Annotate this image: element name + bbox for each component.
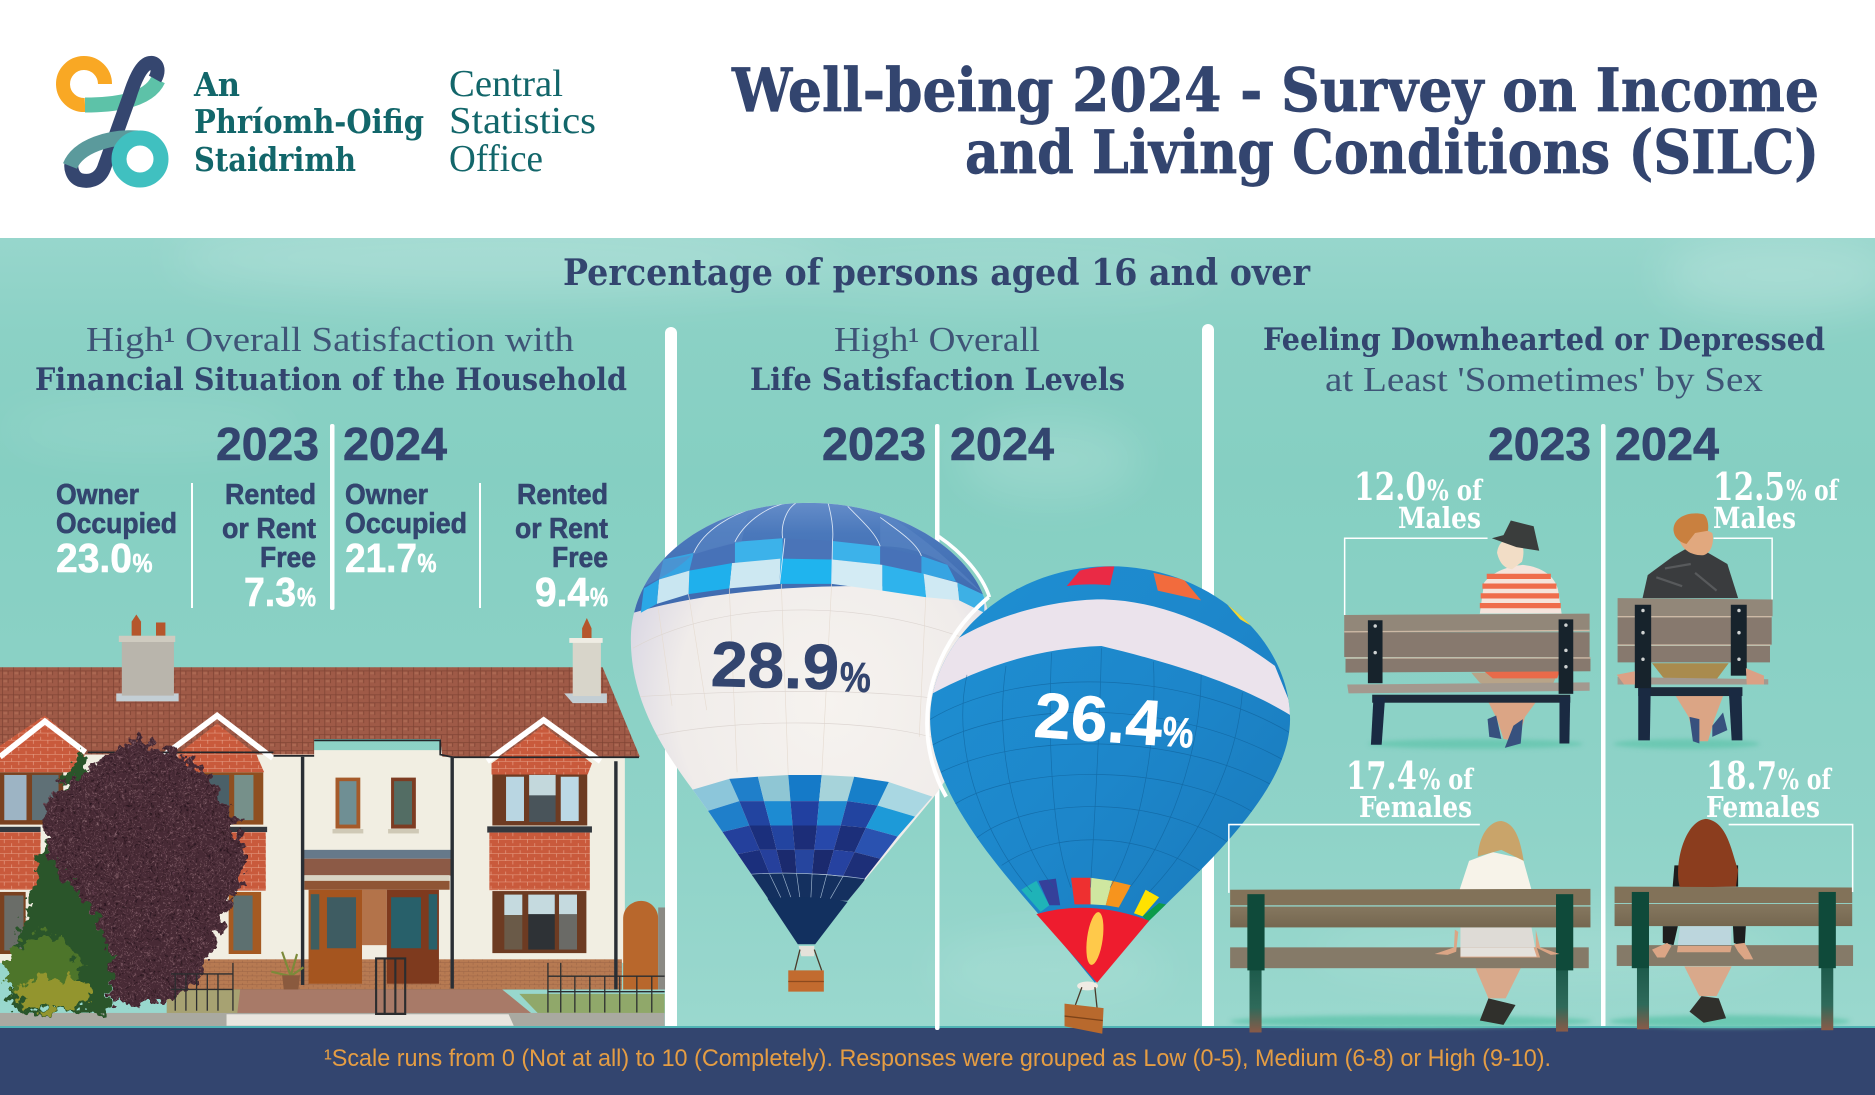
logo: Irish name: Phríomh-Oifig (194, 102, 424, 141)
stat: 2023 owner occupied: Occupied (56, 508, 177, 540)
year labels: right panel: 2023 (1488, 418, 1591, 470)
stat: 2023 rented or rent free: Rented (225, 479, 316, 511)
stat: males 2023 (1354, 464, 1484, 535)
year labels: right panel (1488, 418, 1719, 470)
sky background panel (0, 220, 1875, 1028)
balloon 2024: white halo (927, 597, 989, 797)
stat: females 2023: % of (1419, 763, 1475, 796)
stat: males 2023: 12.0 (1354, 464, 1426, 509)
balloon value: 2023: 28.9 (710, 628, 840, 703)
stat: 2023 owner occupied (56, 479, 177, 581)
panel heading: downhearted or depressed (1263, 322, 1825, 399)
stat: females 2024: Females (1706, 790, 1820, 824)
balloon 2023: neck (767, 897, 848, 944)
house: tile-hung bays (0, 826, 592, 891)
stat: females 2023: 17.4 (1346, 753, 1417, 798)
panel heading: life satisfaction (750, 320, 1125, 398)
year labels: middle panel: 2024 (950, 418, 1054, 470)
house: chimney flashing (116, 693, 607, 703)
stat: 2023 rented or rent free: or Rent (222, 513, 316, 545)
logo: English name: Central (449, 63, 563, 105)
female 2023: person (1460, 821, 1537, 1025)
sub divider: 2024 tenure (479, 483, 481, 608)
house: iron fences (171, 958, 665, 1014)
house: upper windows (0, 772, 587, 833)
stat: 2024 rented or rent free: Free (552, 542, 608, 574)
logo: English name: Office (449, 138, 543, 180)
stat: 2023 owner occupied: Owner (56, 479, 139, 511)
balloon value: 2023: % (839, 653, 871, 701)
house: ground and driveway (0, 989, 665, 1026)
stat: 2024 rented or rent free: or Rent (515, 513, 608, 545)
panel heading: life satisfaction: High¹ Overall (834, 320, 1040, 359)
balloon 2023: upper panels (633, 503, 984, 775)
illustration: balloon 2023 (620, 489, 1010, 992)
panel heading: financial satisfaction: High¹ Overall Satisfaction with (86, 320, 575, 359)
male 2023: person (1471, 521, 1562, 748)
stat: males 2024: Males (1713, 501, 1796, 535)
stat: 2024 owner occupied: Owner (345, 479, 428, 511)
stat: females 2024: 18.7 (1706, 753, 1777, 798)
house: drainpipes (303, 757, 616, 989)
balloon 2023: basket (788, 946, 824, 992)
section heading: Percentage of persons aged 16 and over (563, 252, 1311, 294)
balloon 2023: lower checks (692, 775, 932, 903)
female 2024: arms (1652, 943, 1753, 959)
year labels: left panel: 2024 (343, 418, 447, 470)
logo: Irish name: Staidrimh (194, 140, 356, 179)
stat: 2024 rented or rent free: Rented (517, 479, 608, 511)
brackets (1229, 538, 1853, 893)
balloon 2024: flame (1084, 911, 1106, 966)
balloon value: 2024: 26.4 (1032, 679, 1165, 760)
year divider: right panel (1601, 424, 1606, 1030)
year labels: middle panel (822, 418, 1054, 470)
stat: 2024 owner occupied (345, 479, 467, 581)
balloon value: 2024: % (1161, 708, 1195, 757)
house: copper beech tree (43, 737, 246, 1005)
logo: CSO symbol (63, 63, 161, 181)
stat: males 2024 (1713, 464, 1840, 535)
year labels: left panel (216, 418, 447, 470)
title (731, 56, 1819, 188)
year labels: right panel: 2024 (1615, 418, 1719, 470)
white panel separators (665, 324, 1214, 1032)
stat: 2023 rented or rent free (222, 479, 316, 615)
male 2023: bench (1344, 614, 1590, 745)
male 2024: person (1643, 513, 1738, 743)
male 2024: bench (1618, 598, 1773, 740)
stat: males 2024: % of (1786, 474, 1840, 507)
illustration: house (0, 615, 665, 1026)
panel heading: life satisfaction: Life Satisfaction Levels (750, 362, 1125, 398)
balloon 2024: envelope (930, 566, 1290, 983)
stat: females 2023: Females (1359, 790, 1472, 824)
logo: Irish name (193, 65, 424, 179)
panel heading: downhearted or depressed: at Least 'Sometimes' by Sex (1325, 360, 1764, 399)
male 2024: hands (1617, 668, 1764, 685)
stat: 2024 rented or rent free: 9.4 (535, 569, 589, 615)
balloon 2023: envelope (631, 503, 989, 901)
stat: 2024 owner occupied: Occupied (345, 508, 467, 540)
year labels: left panel: 2023 (216, 418, 319, 470)
house: lower windows (0, 891, 586, 954)
benches illustration (1229, 513, 1853, 1032)
stat: males 2024: 12.5 (1713, 464, 1785, 509)
house: porch (303, 850, 451, 984)
stat: males 2023: % of (1427, 474, 1484, 507)
stat: 2024 rented or rent free: % (590, 582, 608, 612)
female 2023: skirt hem (1460, 947, 1537, 957)
stat: 2024 owner occupied: % (418, 548, 436, 578)
stat: females 2024: % of (1778, 763, 1833, 796)
house: walls (0, 750, 625, 963)
house: brick base (184, 959, 622, 989)
logo: Irish name: An (193, 65, 240, 104)
female 2023: bench (1230, 889, 1590, 1032)
logo: English name: Statistics (449, 100, 596, 142)
female 2024: person (1663, 819, 1746, 1023)
logo: English name (449, 63, 596, 180)
female 2024: bench (1615, 887, 1853, 1030)
house: chimneys (119, 615, 603, 696)
panel heading: downhearted or depressed: Feeling Downhearted or Depressed (1263, 322, 1825, 358)
footer bar (0, 1026, 1875, 1095)
panel heading: financial satisfaction: Financial Situation of the Household (35, 362, 627, 398)
house: planter (271, 952, 303, 989)
stat: 2023 owner occupied: 23.0 (56, 535, 132, 581)
footnote: ¹Scale runs from 0 (Not at all) to 10 (Completely). Responses were grouped as Low (0-5), Medium (6-8) or High (9-10). (324, 1045, 1551, 1072)
stat: 2023 rented or rent free: % (297, 582, 316, 612)
house: side gate (623, 901, 665, 989)
stat: females 2023 (1346, 753, 1475, 824)
stat: 2024 owner occupied: 21.7 (345, 535, 417, 581)
stat: 2024 rented or rent free (515, 479, 608, 615)
white header background (0, 0, 1875, 238)
balloon 2023: halo (939, 537, 990, 597)
stat: 2023 owner occupied: % (132, 548, 152, 578)
sub divider: 2023 tenure (191, 483, 193, 608)
ground shadows (1230, 739, 1850, 1028)
stat: males 2023: Males (1398, 501, 1481, 535)
year divider: left panel (330, 424, 334, 610)
balloon 2024: panels (924, 566, 1297, 923)
house: eaves (88, 740, 639, 757)
year divider: middle panel (935, 424, 940, 1030)
year labels: middle panel: 2023 (822, 418, 926, 470)
balloon 2024: basket (1065, 981, 1104, 1034)
stat: females 2024 (1706, 753, 1833, 824)
stat: 2023 rented or rent free: 7.3 (244, 569, 296, 615)
illustration: balloon 2024 (924, 566, 1297, 1034)
female 2023: arms (1435, 930, 1559, 958)
panel heading: financial satisfaction (35, 320, 627, 398)
house: roof (0, 667, 640, 757)
balloon 2024: burner skirt (1036, 908, 1149, 983)
house: shrubs (6, 755, 114, 1012)
house: gables (0, 716, 600, 775)
stat: 2023 rented or rent free: Free (260, 542, 316, 574)
